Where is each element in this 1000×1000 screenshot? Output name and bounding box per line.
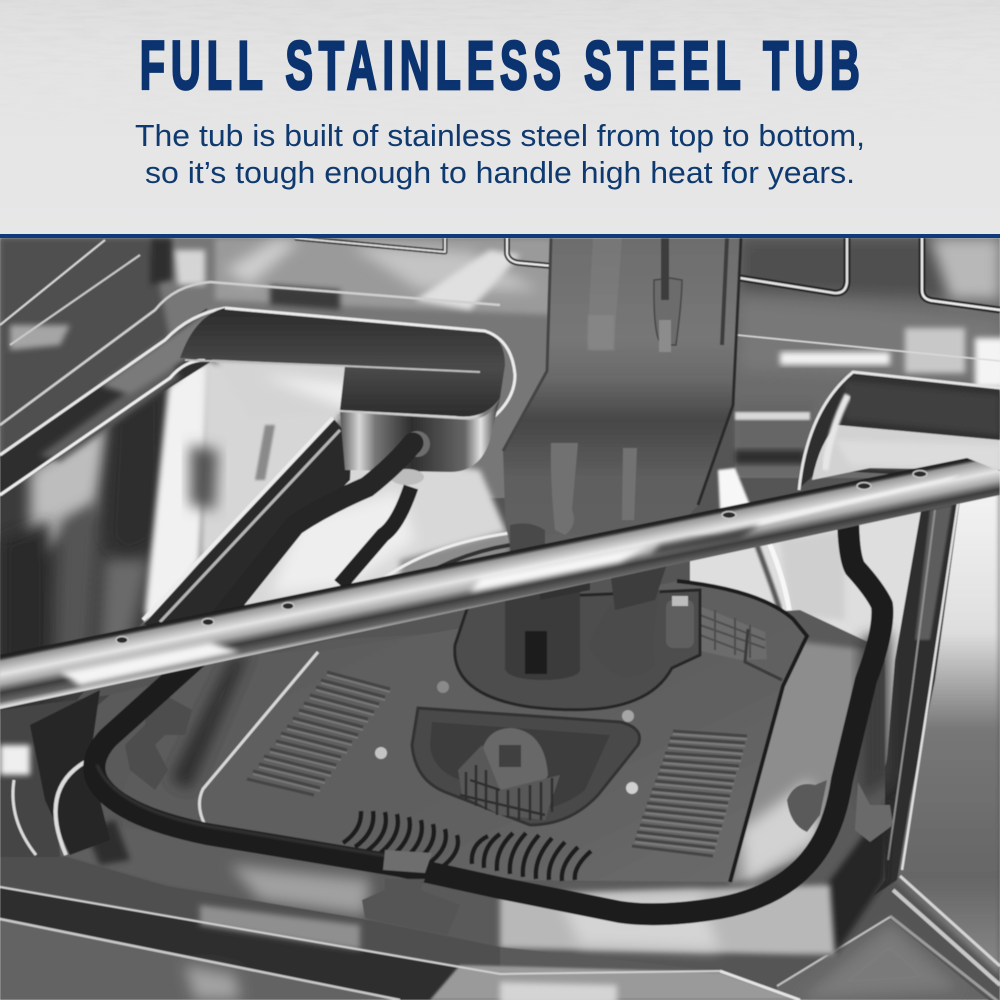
spray arm hub ring and pipes — [455, 555, 700, 710]
left wall — [0, 360, 485, 720]
title: FULL STAINLESS STEEL TUB — [140, 27, 860, 105]
filter basket recess — [412, 708, 640, 825]
back wall, upper right — [735, 238, 1000, 478]
front door edge — [0, 857, 800, 1000]
photo: stainless steel dishwasher tub interior — [0, 238, 1000, 1000]
curved slots, bottom — [343, 811, 591, 881]
thin hose — [340, 487, 411, 585]
header divider line — [0, 234, 1000, 238]
description text — [135, 118, 865, 190]
left chrome corner — [0, 690, 110, 857]
right wall — [895, 485, 1000, 975]
header panel — [0, 0, 1000, 235]
right strut — [874, 503, 960, 894]
bright tub wall below inlet — [244, 465, 510, 606]
left rear shelf — [0, 240, 515, 495]
screws — [375, 681, 638, 794]
hose clip and door tag — [362, 849, 432, 919]
ribbed vent, right — [632, 731, 747, 856]
description text: The tub is built of stainless steel from top to bottom, — [135, 118, 865, 153]
bright wall below rail on right — [689, 511, 922, 766]
corner seams — [776, 876, 1000, 1000]
mesh filter — [697, 605, 782, 680]
black hose, upper left — [215, 443, 413, 625]
right rear shelf — [718, 372, 1000, 510]
ribbed vent, left — [247, 672, 390, 795]
back wall, upper left — [0, 238, 560, 498]
description text: so it’s tough enough to handle high heat for years. — [145, 155, 855, 190]
black hose loop — [94, 510, 882, 914]
sump plate — [197, 581, 807, 882]
floor of the tub — [60, 610, 890, 955]
hose clips and ears — [125, 690, 893, 842]
wall inlet fitting — [340, 398, 500, 485]
rack wires — [295, 238, 1000, 310]
central duct — [503, 238, 741, 570]
strut on the left wall — [143, 418, 352, 625]
large stainless rail — [0, 458, 1000, 709]
